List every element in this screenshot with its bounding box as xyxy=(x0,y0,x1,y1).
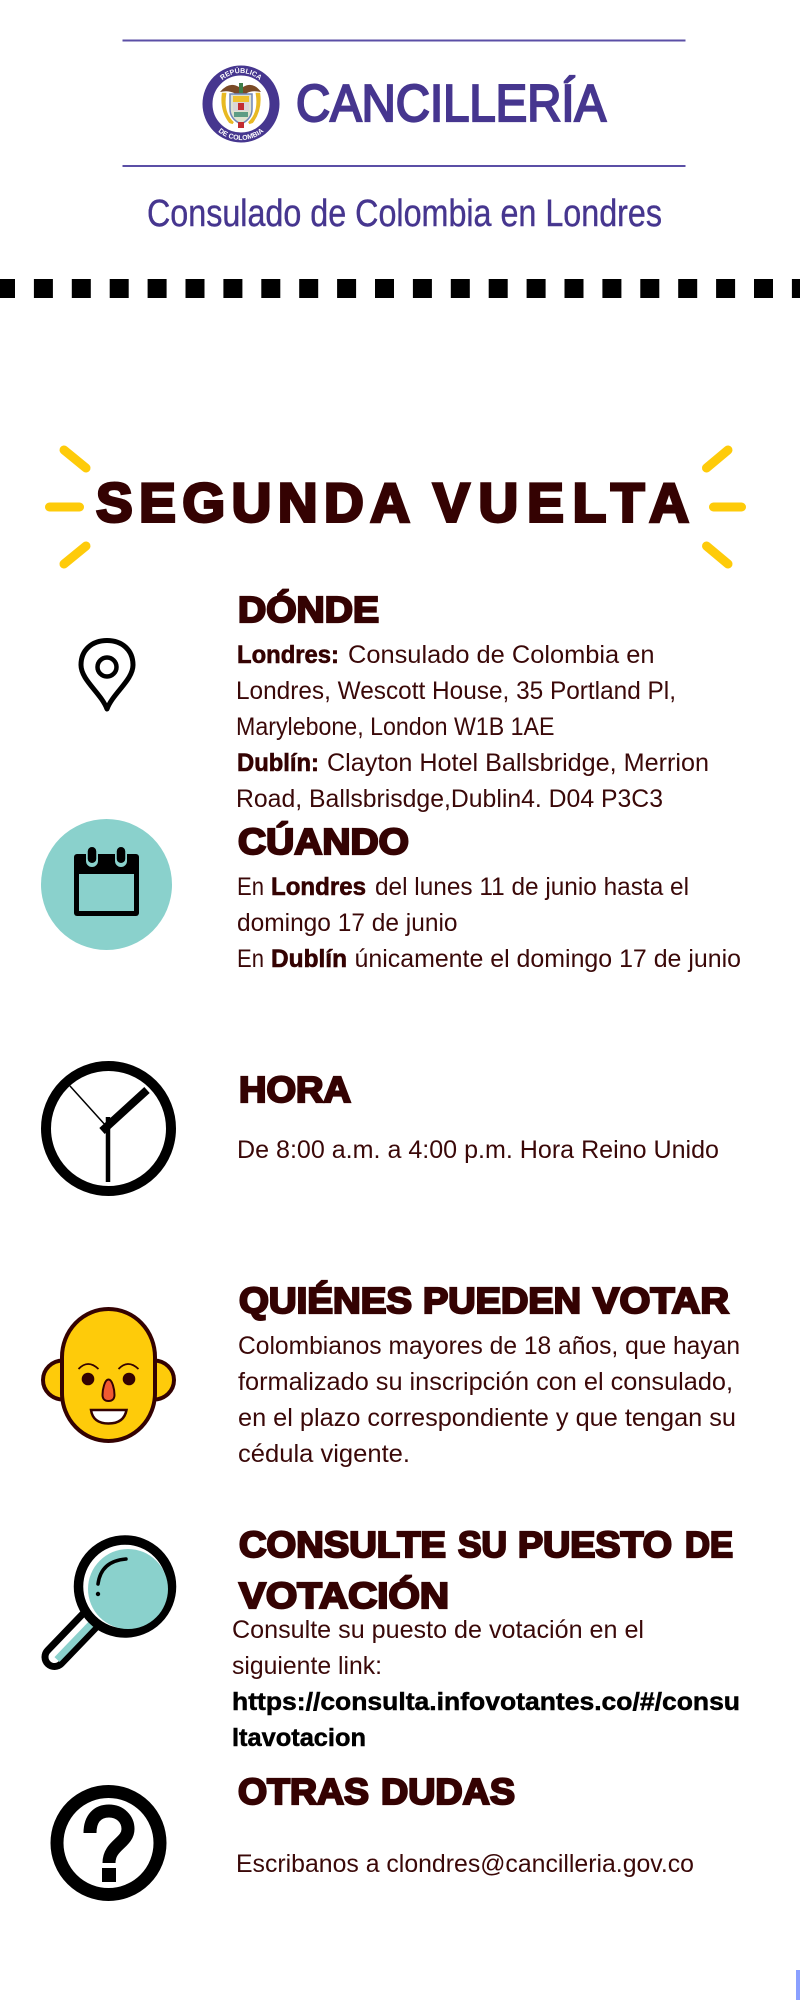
text: consulte details: siguiente link: xyxy=(232,1652,382,1680)
text: cuando details: Londres xyxy=(271,873,366,901)
text: quienes details: cédula vigente. xyxy=(238,1440,410,1468)
text: donde details: Marylebone, London W1B 1AE xyxy=(236,713,554,741)
text: consulte details xyxy=(232,1616,740,1752)
heading: otras dudas: DUDAS xyxy=(381,1771,515,1812)
section: consulte su puesto xyxy=(54,1524,740,1752)
text: donde details: Consulado de Colombia en xyxy=(348,641,654,669)
heading: cuando: CÚANDO xyxy=(238,820,409,862)
heading: consulte su puesto de votacion: PUESTO xyxy=(518,1524,672,1565)
text: cuando details xyxy=(237,873,741,973)
heading: consulte su puesto de votacion xyxy=(239,1524,733,1616)
dashed divider xyxy=(0,279,800,298)
text: donde details: Road, Ballsbrisdge,Dublin4. D04 P3C3 xyxy=(236,785,663,813)
icon: face xyxy=(43,1309,174,1441)
section: donde xyxy=(81,588,709,813)
text: cuando details: En xyxy=(237,945,264,973)
text: quienes details: en el plazo correspondiente y que tengan su xyxy=(238,1404,736,1432)
heading: donde: DÓNDE xyxy=(238,588,379,630)
icon: clock xyxy=(46,1066,171,1191)
title: SEGUNDA xyxy=(96,472,410,534)
text: consulte details: Consulte su puesto de votación en el xyxy=(232,1616,644,1644)
text: cuando details: del lunes 11 de junio hasta el xyxy=(375,873,689,901)
icon: magnifying glass xyxy=(54,1540,172,1660)
consulate name: Consulado de Colombia en Londres xyxy=(147,193,662,235)
heading: quienes pueden votar: PUEDEN xyxy=(423,1280,581,1321)
heading: quienes pueden votar: VOTAR xyxy=(593,1280,729,1321)
text: otras dudas details: Escribanos a clondres@cancilleria.gov.co xyxy=(236,1850,694,1878)
text: cuando details: únicamente el domingo 17 de junio xyxy=(354,945,741,973)
text: donde details: Londres, Wescott House, 35 Portland Pl, xyxy=(236,677,676,705)
heading: otras dudas xyxy=(238,1771,515,1812)
logo: coat of arms emblem xyxy=(202,66,280,142)
title burst rays xyxy=(50,450,742,564)
blue corner tab xyxy=(796,1970,800,2000)
text: consulte details: https://consulta.infovotantes.co/#/consu xyxy=(232,1688,740,1716)
section: quienes pueden votar xyxy=(43,1280,740,1468)
text: cuando details: Dublín xyxy=(271,945,347,973)
heading: consulte su puesto de votacion: CONSULTE xyxy=(239,1524,446,1565)
text: cuando details: En xyxy=(237,873,264,901)
title xyxy=(96,472,689,534)
heading: consulte su puesto de votacion: VOTACIÓN xyxy=(239,1574,449,1616)
text: quienes details: formalizado su inscripción con el consulado, xyxy=(238,1368,733,1396)
section: hora xyxy=(46,1066,719,1191)
text: quienes details xyxy=(238,1332,740,1468)
heading: consulte su puesto de votacion: DE xyxy=(685,1524,733,1565)
heading: consulte su puesto de votacion: SU xyxy=(458,1524,507,1565)
text: consulte details: ltavotacion xyxy=(232,1724,366,1752)
title: VUELTA xyxy=(433,472,689,534)
section: otras dudas xyxy=(57,1771,694,1894)
text: hora details: De 8:00 a.m. a 4:00 p.m. Hora Reino Unido xyxy=(237,1136,719,1164)
icon: calendar xyxy=(41,819,172,950)
heading: otras dudas: OTRAS xyxy=(238,1771,369,1812)
text: donde details: Londres: xyxy=(237,641,339,669)
heading: quienes pueden votar: QUIÉNES xyxy=(239,1280,412,1321)
text: quienes details: Colombianos mayores de 18 años, que hayan xyxy=(238,1332,740,1360)
text: donde details xyxy=(236,641,709,813)
text: cuando details: domingo 17 de junio xyxy=(237,909,458,937)
icon: question mark xyxy=(57,1792,160,1894)
section: cuando xyxy=(41,819,741,973)
heading: quienes pueden votar xyxy=(239,1280,729,1321)
text: donde details: Clayton Hotel Ballsbridge, Merrion xyxy=(327,749,709,777)
logo: coat of arms emblem: REPÚBLICA xyxy=(220,66,261,80)
heading: hora: HORA xyxy=(239,1069,351,1110)
text: donde details: Dublín: xyxy=(237,749,319,777)
logo wordmark: CANCILLERÍA xyxy=(296,75,606,133)
icon: map pin xyxy=(81,640,133,709)
header rule top xyxy=(122,40,686,42)
header rule bottom xyxy=(122,165,686,167)
logo: coat of arms emblem: DE COLOMBIA xyxy=(218,128,264,140)
